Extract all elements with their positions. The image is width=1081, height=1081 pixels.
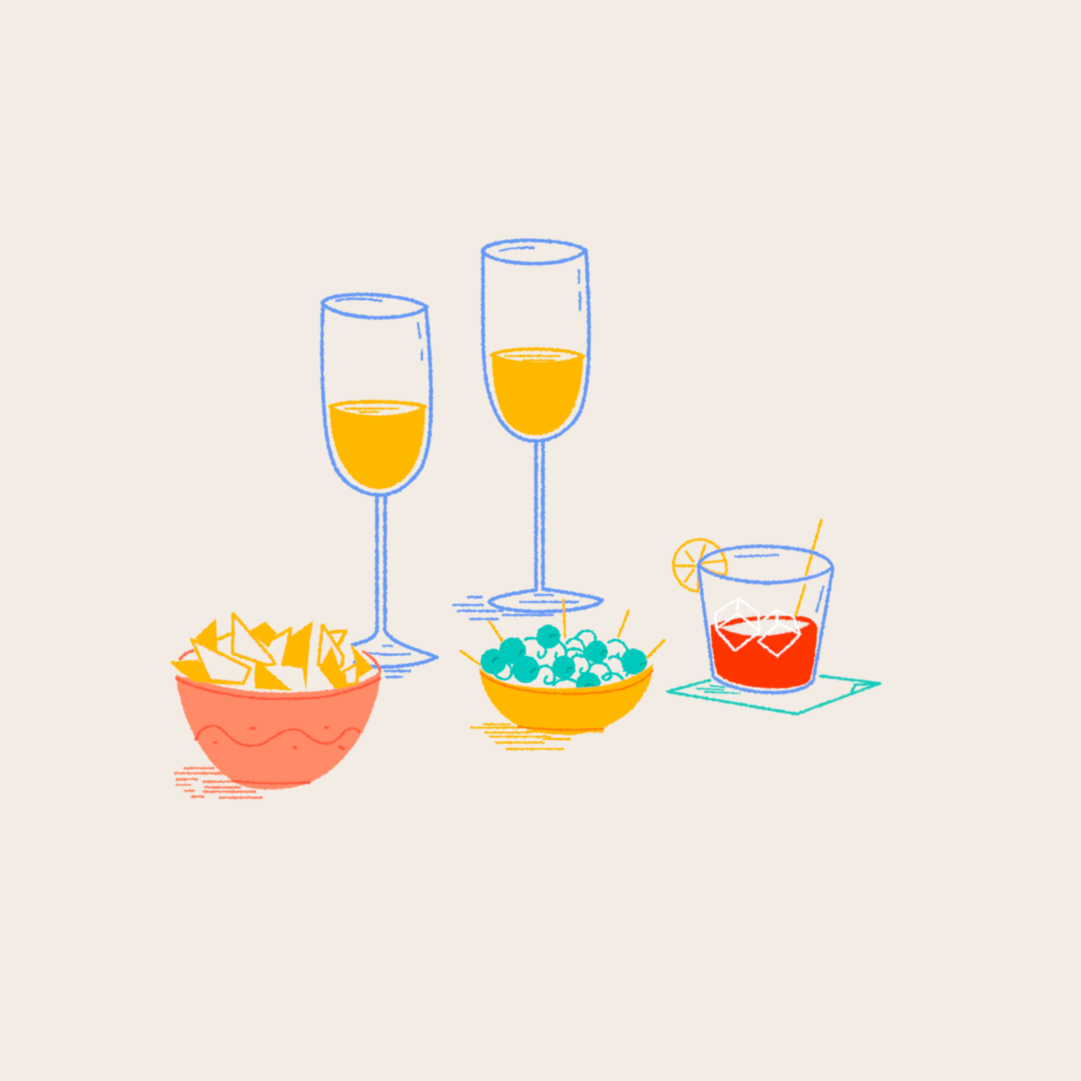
front outlined chip bbox=[192, 639, 250, 683]
bowl rim line bbox=[481, 671, 652, 730]
cocktail liquid bbox=[711, 616, 817, 688]
nachos bbox=[170, 614, 373, 691]
bowl back rim bbox=[180, 651, 380, 672]
coaster bbox=[667, 676, 880, 714]
right glass outline bbox=[453, 240, 602, 619]
solid chips front bbox=[255, 621, 373, 691]
left glass wine bbox=[330, 402, 425, 489]
olives bowl bbox=[461, 600, 664, 749]
solid chips behind bbox=[170, 618, 277, 686]
bowl decoration lines bbox=[177, 678, 380, 783]
liquid surface bbox=[719, 619, 810, 636]
tumbler outline bbox=[698, 546, 833, 693]
bowl body bbox=[176, 670, 381, 790]
chip backs bbox=[218, 614, 358, 691]
chips bowl bbox=[170, 614, 381, 798]
straw bbox=[796, 520, 821, 615]
citrus slice bbox=[673, 540, 726, 591]
left wine glass bbox=[322, 294, 437, 677]
right wine glass bbox=[453, 240, 602, 619]
outlined olives bbox=[490, 628, 648, 685]
solid olives bbox=[480, 625, 647, 697]
bowl shadow hatching bbox=[175, 768, 262, 798]
bowl shadow hatching bbox=[471, 724, 603, 749]
right glass wine bbox=[492, 349, 583, 435]
olives bbox=[480, 625, 648, 697]
bowl body bbox=[479, 664, 653, 735]
left glass outline bbox=[322, 294, 437, 677]
olive pits bbox=[493, 634, 646, 686]
ice cubes bbox=[715, 598, 800, 656]
red cocktail bbox=[667, 520, 880, 714]
toothpicks bbox=[461, 600, 664, 665]
illustration: drinks and snacks bbox=[170, 240, 880, 798]
